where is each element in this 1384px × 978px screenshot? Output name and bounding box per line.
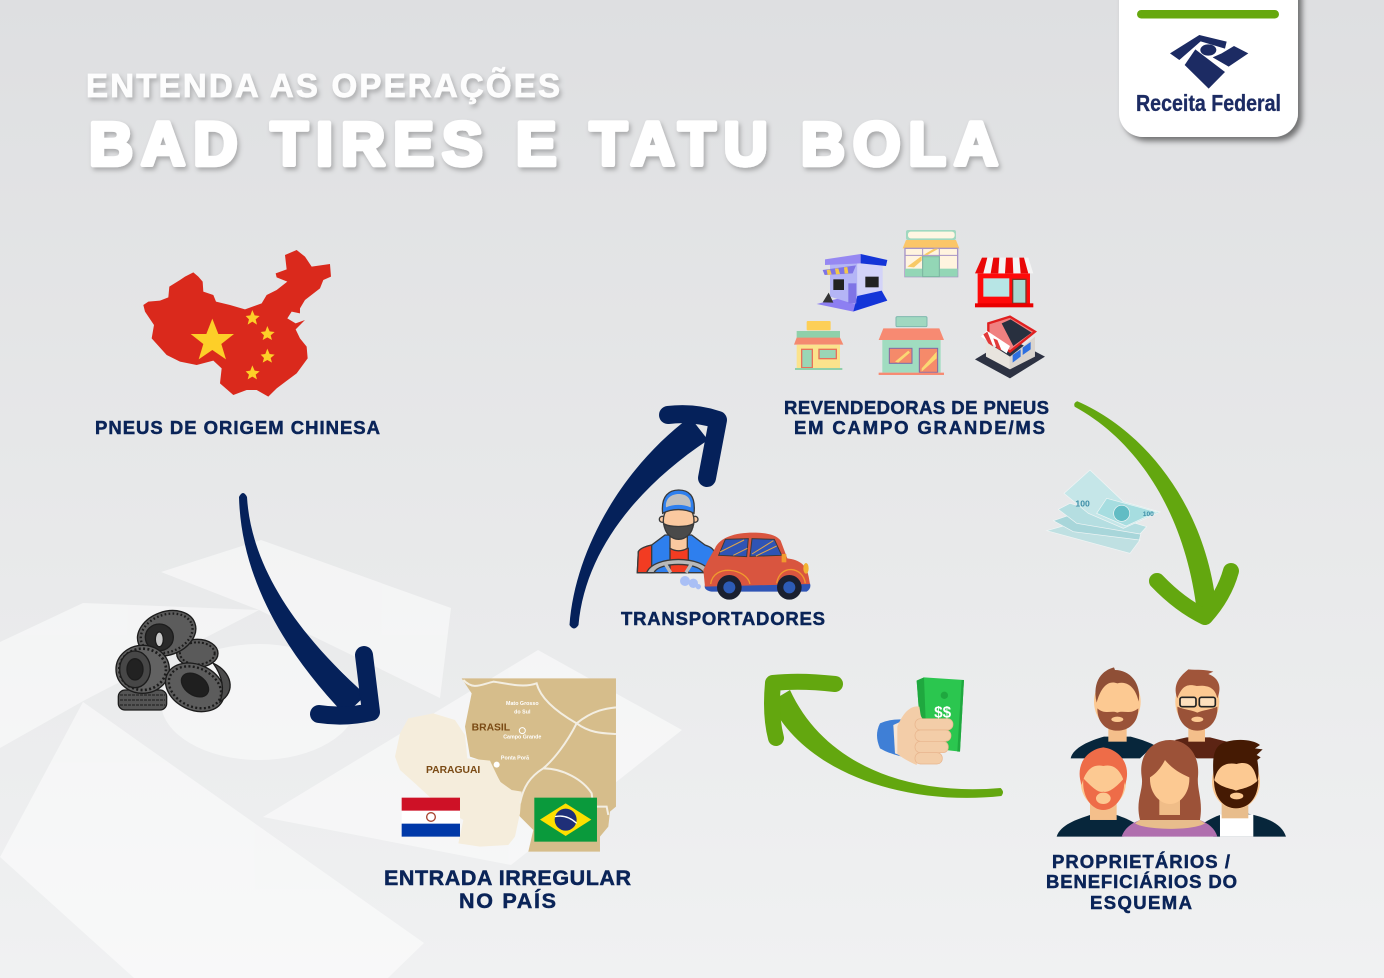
smoke [680,576,701,589]
label: owners and beneficiaries: ESQUEMA [1090,892,1192,913]
arrow: border to transporters [570,414,718,628]
label: irregular entry: NO PAÍS [459,888,556,913]
icon: Receita Federal emblem [1170,35,1248,89]
person: dark hair man [1203,740,1286,837]
label: owners and beneficiaries [1046,851,1237,913]
map: Paraguay and Brazil: Ponta Porã [501,755,529,761]
car [703,533,810,600]
flag: Paraguay [402,798,460,837]
label: resellers: EM CAMPO GRANDE/MS [794,417,1045,438]
arrow: owners to transporters [770,682,1003,798]
main title: BAD TIRES E TATU BOLA [89,110,998,178]
person: woman [1122,740,1217,837]
label: owners and beneficiaries: BENEFICIÁRIOS DO [1046,871,1237,892]
map: Paraguay and Brazil: do Sul [514,709,531,715]
map label: Paraguai: PARAGUAI [426,765,480,776]
label: resellers [784,397,1049,438]
label: resellers: REVENDEDORAS DE PNEUS [784,397,1049,418]
label: owners and beneficiaries: PROPRIETÁRIOS / [1052,851,1230,872]
map label: Brasil: BRASIL [472,723,510,734]
store: yellow [794,321,843,370]
flag: Brazil [534,798,597,842]
store: green [879,317,944,375]
driver [637,490,715,573]
map: Paraguay and Brazil: Campo Grande [503,735,541,741]
label: irregular entry: ENTRADA IRREGULAR [384,866,631,890]
store: isometric [975,317,1045,378]
person: man with glasses [1175,669,1227,758]
icon: people (owners and beneficiaries) [1057,667,1286,837]
icon: resale stores [794,230,1045,378]
map: Paraguay and Brazil: Mato Grosso [506,701,539,707]
label: irregular entry [384,866,631,913]
icon: banknotes: 100 [1075,499,1090,509]
eyebrow heading: ENTENDA AS OPERAÇÕES [86,67,560,104]
icon: hand holding money [877,677,964,765]
icon: banknotes [1047,470,1160,553]
store: purple [817,254,887,312]
store: cream and teal [903,230,959,277]
icon: tire pile [116,603,232,721]
icon: hand holding money: $$ [934,705,952,722]
person: red hair man [1057,747,1135,837]
icon: driver and car [637,490,810,600]
icon: banknotes: 100 [1143,511,1154,518]
icon: China map [143,250,331,397]
title block [86,67,998,178]
store: red [975,258,1033,307]
label: transporters: TRANSPORTADORES [621,608,825,629]
label: Chinese tires: PNEUS DE ORIGEM CHINESA [95,417,380,438]
arrow: tires to border [239,493,371,716]
person: bearded man top left [1071,667,1154,758]
arrow: resellers to owners [1074,401,1231,617]
logo card: Receita Federal [1119,0,1298,137]
logo wordmark: Receita Federal [1136,90,1281,116]
map: Paraguay and Brazil [395,678,616,852]
